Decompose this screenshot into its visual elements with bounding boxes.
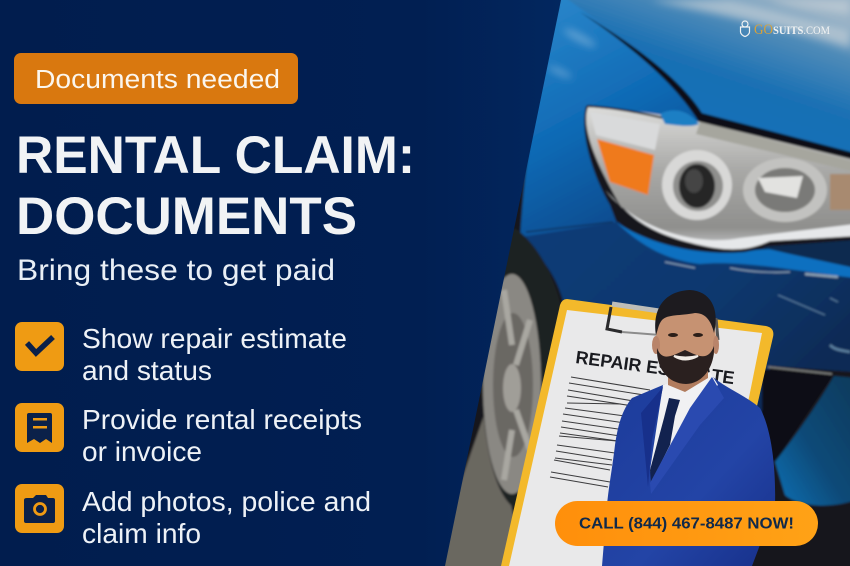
title bbox=[16, 126, 415, 246]
attorney figure bbox=[602, 290, 775, 566]
headlight bbox=[586, 106, 850, 251]
item: rental receipts bbox=[15, 403, 362, 467]
shield lock icon bbox=[740, 21, 750, 36]
checklist bbox=[15, 322, 371, 549]
indicator strip bbox=[696, 122, 850, 172]
hood seam bbox=[580, 12, 850, 164]
icon: camera bbox=[15, 484, 64, 533]
bright bumper edge under the headlight bbox=[616, 222, 850, 278]
ear bbox=[652, 336, 660, 354]
title: RENTAL CLAIM: bbox=[16, 126, 415, 185]
projector ring bbox=[662, 150, 732, 220]
damage scratches bbox=[778, 295, 850, 352]
right ear bbox=[713, 336, 719, 354]
left navy panel bbox=[0, 0, 561, 566]
logo wordmark: GOSUITS.COM bbox=[754, 22, 830, 38]
headlight rim top bbox=[590, 112, 660, 150]
lamp chrome trim bbox=[605, 190, 850, 249]
lamp bottom shadow bbox=[622, 208, 850, 251]
amber indicator bbox=[597, 139, 654, 195]
car hood bbox=[550, 0, 850, 165]
tie bbox=[650, 398, 680, 483]
left lapel bbox=[641, 387, 663, 487]
smile bbox=[674, 356, 698, 360]
third lamp bbox=[830, 174, 850, 210]
wheel rim bbox=[483, 274, 541, 494]
ground bbox=[430, 407, 525, 566]
projector lens bbox=[679, 164, 715, 208]
clipboard paper bbox=[509, 310, 762, 566]
car photo background bbox=[430, 0, 850, 566]
item: rental receipts: Provide rental receipts bbox=[82, 404, 362, 435]
tyre and wheel arch bbox=[482, 228, 570, 510]
second lamp bbox=[743, 158, 827, 222]
body panel seam bbox=[526, 222, 613, 232]
item: photos and claim info: Add photos, police and bbox=[82, 486, 371, 517]
clipboard heading: REPAIR ESTIMATE bbox=[574, 347, 736, 388]
neck bbox=[668, 365, 708, 392]
front fender bbox=[520, 0, 704, 240]
call to action button bbox=[555, 501, 818, 546]
document ruled lines bbox=[550, 377, 650, 487]
lower blue lip bbox=[775, 376, 850, 505]
headlight top outline bbox=[587, 106, 668, 119]
fender reflections bbox=[547, 26, 598, 80]
bumper bbox=[515, 222, 850, 420]
badge: documents needed: Documents needed bbox=[35, 66, 280, 94]
clipboard bbox=[501, 299, 773, 566]
bumper chrome strip bbox=[768, 367, 832, 374]
site logo bbox=[740, 21, 830, 38]
face bbox=[656, 300, 716, 380]
headlight arm of fender bbox=[660, 110, 699, 126]
dark grille bbox=[762, 369, 832, 470]
sky reflections on hood bbox=[650, 0, 850, 48]
item: repair estimate bbox=[15, 322, 347, 386]
subtitle: Bring these to get paid bbox=[17, 254, 335, 287]
title: DOCUMENTS bbox=[16, 187, 357, 246]
scuffs on bumper bbox=[665, 262, 838, 277]
shirt bbox=[650, 372, 718, 480]
icon: check mark bbox=[15, 322, 64, 371]
beard bbox=[657, 346, 714, 384]
item: repair estimate: and status bbox=[82, 355, 212, 386]
suit jacket bbox=[602, 376, 775, 566]
clipboard yellow board bbox=[501, 299, 773, 566]
item: rental receipts: or invoice bbox=[82, 436, 202, 467]
item: repair estimate: Show repair estimate bbox=[82, 323, 347, 354]
dark recess under headlight bbox=[760, 240, 850, 268]
icon: receipt bbox=[15, 403, 64, 452]
hair bbox=[655, 290, 716, 335]
item: photos and claim info: claim info bbox=[82, 518, 201, 549]
item: photos and claim info bbox=[15, 484, 371, 549]
badge: documents needed bbox=[14, 53, 298, 104]
lapel bbox=[650, 377, 724, 494]
call to action button: CALL (844) 467-8487 NOW! bbox=[579, 516, 794, 532]
clipboard metal clip bbox=[607, 304, 718, 340]
eyes bbox=[668, 333, 678, 337]
